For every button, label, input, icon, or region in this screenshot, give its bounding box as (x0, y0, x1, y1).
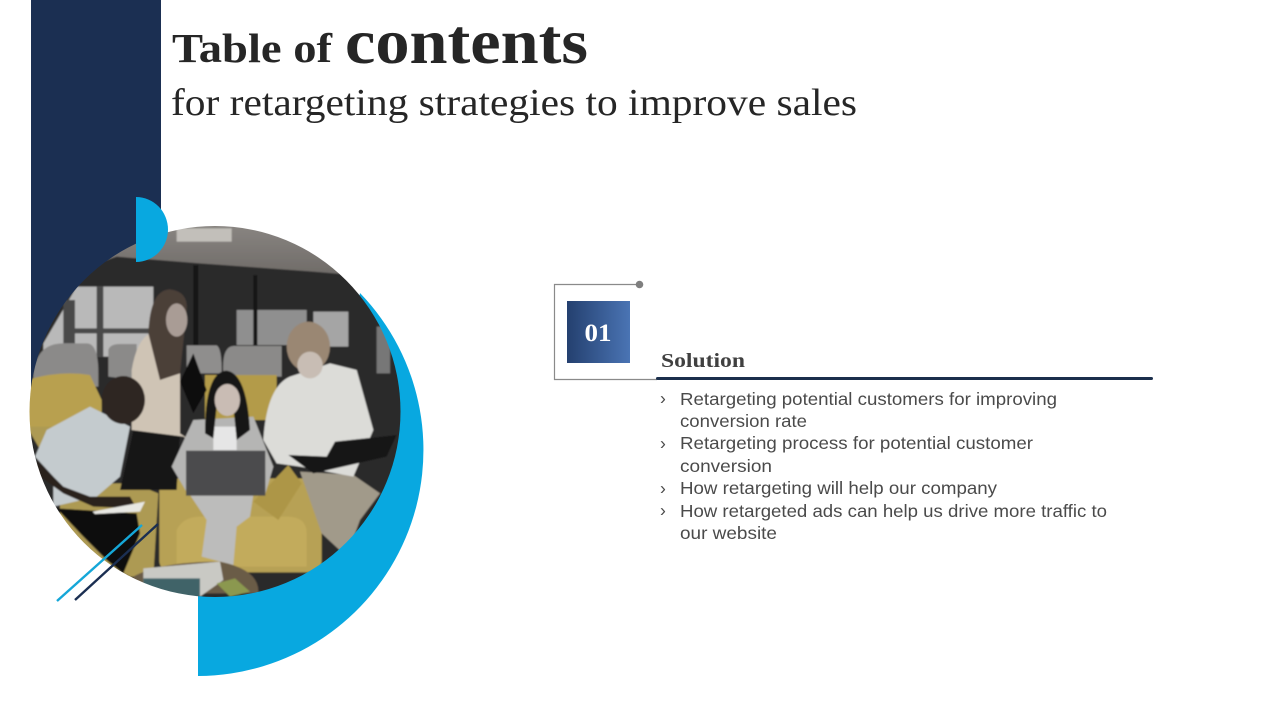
table and books (133, 562, 258, 593)
bullet 3: › (660, 478, 666, 498)
bullet 2 (660, 433, 1033, 476)
bullet 4: our website (680, 523, 777, 543)
number badge: 01 (584, 320, 612, 347)
woman centre (172, 417, 273, 495)
bullet 4: › (660, 500, 666, 520)
bullet 2: › (660, 433, 666, 453)
subtitle: for retargeting strategies to improve sales (171, 82, 857, 124)
ceiling (107, 226, 340, 275)
photo: team working on sofa (30, 226, 400, 597)
number badge (567, 301, 630, 363)
windows right (237, 310, 307, 345)
bullet list (660, 388, 1107, 543)
bullet 1: › (660, 388, 666, 408)
title: contents (345, 6, 588, 77)
bullet 1: conversion rate (680, 411, 807, 431)
title (172, 6, 588, 77)
section heading: Solution (661, 350, 745, 372)
small blue half circle (136, 197, 168, 262)
bullet 4: How retargeted ads can help us drive more traffic to (680, 501, 1107, 521)
bullet 4 (660, 500, 1107, 543)
number box frame (554, 281, 657, 380)
navy diagonal line (75, 524, 158, 600)
cyan diagonal line (57, 525, 142, 601)
bullet 1 (660, 388, 1057, 431)
bullet 3: How retargeting will help our company (680, 478, 997, 498)
bullet 2: conversion (680, 456, 772, 476)
man left (57, 508, 140, 573)
windows left (43, 287, 153, 357)
woman standing (120, 430, 180, 490)
heading underline (656, 377, 1153, 380)
grey sofa backs (33, 343, 98, 387)
title: Table of (172, 25, 334, 71)
bullet 1: Retargeting potential customers for improving (680, 389, 1057, 409)
navy vertical band (31, 0, 161, 400)
yellow sofas (30, 372, 103, 428)
bullet 2: Retargeting process for potential customer (680, 433, 1033, 453)
clipboard (180, 353, 207, 413)
man right (300, 472, 380, 557)
large blue crescent (198, 293, 423, 676)
